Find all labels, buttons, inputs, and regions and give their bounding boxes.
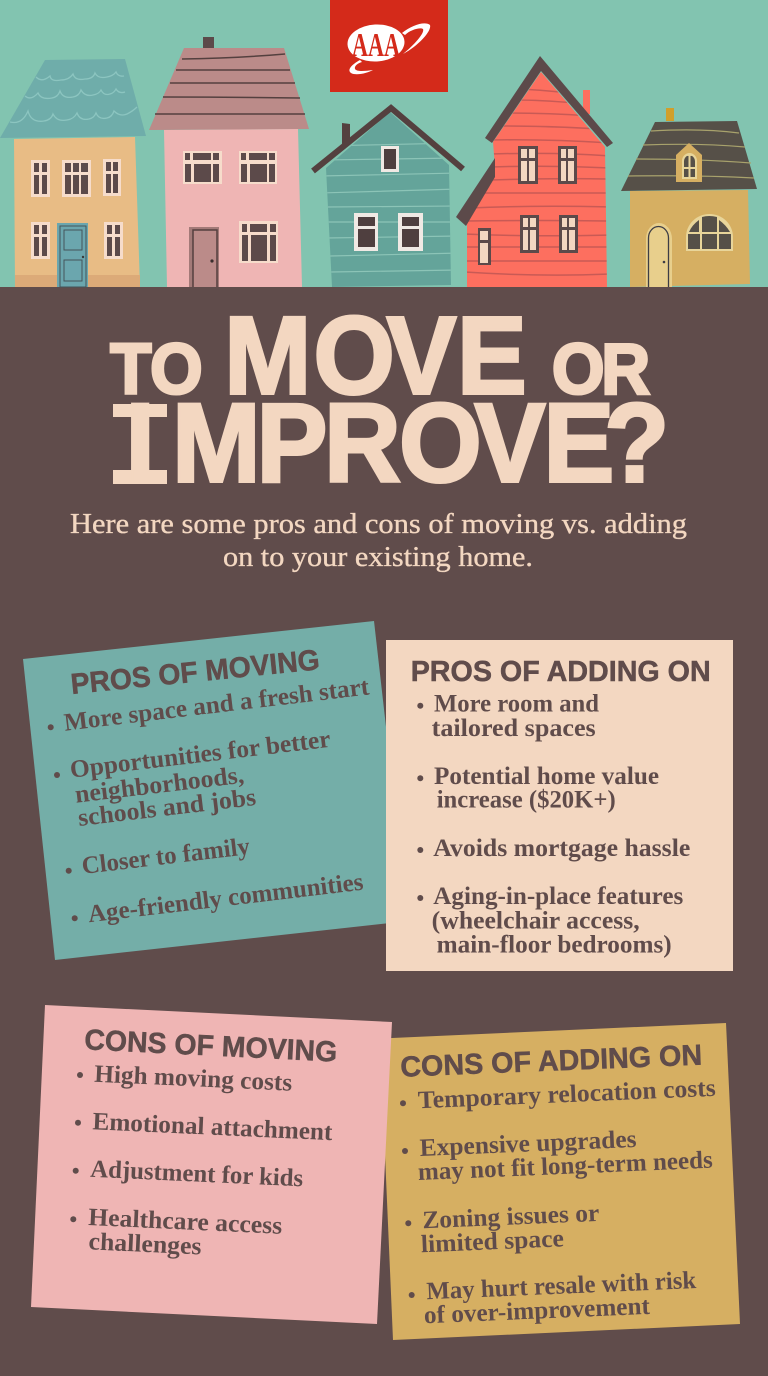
house 5: gold with dark roof and dormer (621, 108, 757, 287)
bullet list: cons of adding on: May hurt resale with risk (426, 1267, 697, 1305)
heading: pros of adding on: PROS OF ADDING ON (411, 656, 711, 688)
bullet list: cons of adding on: Expensive upgrades (419, 1126, 637, 1162)
title line 1: MOVE (224, 294, 527, 417)
subtitle: on to your existing home. (223, 541, 533, 573)
bullet list: cons of adding on: Temporary relocation costs (417, 1075, 717, 1114)
panel: cons of moving (31, 1005, 392, 1324)
bullet list: cons of adding on: Zoning issues or (422, 1200, 600, 1234)
logo: AAA: AAA (352, 27, 400, 64)
house 1: tan with teal scalloped roof (0, 59, 146, 287)
bullet list: cons of moving: Emotional attachment (92, 1108, 334, 1146)
panel: pros of adding on (386, 640, 733, 971)
bullet list: pros of adding on: increase ($20K+) (437, 787, 616, 814)
title (110, 294, 669, 506)
bullet list: pros of adding on: tailored spaces (432, 715, 596, 742)
heading: cons of adding on: CONS OF ADDING ON (400, 1040, 703, 1084)
title line 2: IMPROVE? (125, 381, 669, 506)
panel: cons of adding on (380, 1023, 740, 1340)
subtitle (70, 508, 687, 573)
house 2: pink with mauve roof (149, 37, 309, 287)
heading: cons of moving: CONS OF MOVING (84, 1024, 338, 1069)
bullet list: cons of adding on (400, 1075, 717, 1329)
title line 1: TO (110, 329, 203, 409)
ground and page background (0, 287, 768, 1376)
bullet list: cons of adding on: may not fit long-term needs (417, 1147, 714, 1186)
bullet list: pros of adding on: (wheelchair access, (432, 907, 640, 934)
subtitle: Here are some pros and cons of moving vs. adding (70, 508, 687, 540)
logo: AAA (330, 0, 448, 92)
bullet list: pros of adding on: Avoids mortgage hassle (433, 835, 690, 862)
panel: pros of moving (23, 621, 408, 960)
bullet list: cons of moving: challenges (88, 1228, 202, 1260)
bullet list: pros of adding on: Aging-in-place features (433, 883, 684, 910)
sky background (0, 0, 768, 288)
bullet list: pros of adding on (417, 691, 690, 958)
bullet list: cons of adding on: of over-improvement (423, 1293, 651, 1329)
bullet list: pros of moving: More space and a fresh start (63, 673, 371, 737)
title line 1: OR (552, 329, 650, 409)
bullet list: cons of moving (70, 1061, 334, 1260)
house 3: green with dark gable roof (313, 108, 463, 287)
bullet list: pros of adding on: More room and (434, 691, 599, 718)
house 4: coral with dark roof (456, 56, 613, 287)
bullet list: pros of moving: Closer to family (80, 833, 252, 880)
bullet list: cons of moving: Healthcare access (88, 1204, 283, 1240)
bullet list: cons of adding on: limited space (420, 1225, 564, 1258)
bullet list: pros of adding on: main-floor bedrooms) (437, 931, 672, 958)
bullet list: pros of moving: neighborhoods, (74, 762, 246, 809)
bullet list: pros of moving: schools and jobs (77, 784, 258, 832)
title line 1 (110, 294, 650, 417)
bullet list: cons of moving: High moving costs (94, 1061, 293, 1097)
bullet list: pros of moving: Opportunities for better (69, 726, 332, 784)
bullet list: pros of moving: Age-friendly communities (87, 869, 365, 928)
heading: pros of moving: PROS OF MOVING (69, 644, 321, 701)
bullet list: pros of adding on: Potential home value (434, 763, 659, 790)
bullet list: pros of moving (48, 673, 371, 928)
bullet list: cons of moving: Adjustment for kids (90, 1156, 304, 1192)
